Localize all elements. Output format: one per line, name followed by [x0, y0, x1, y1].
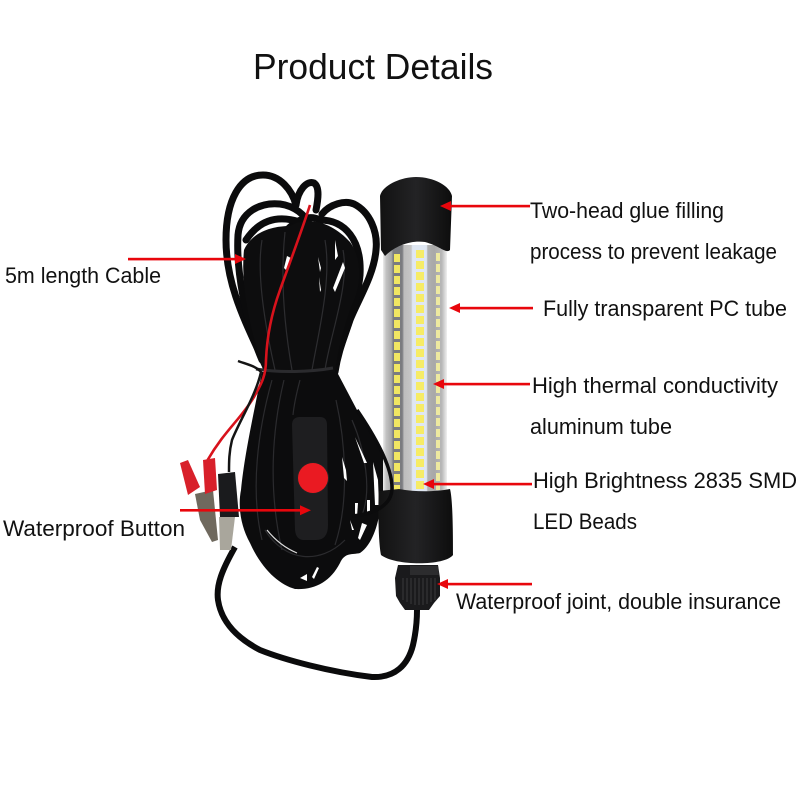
- PC tube: [383, 245, 447, 495]
- lower cable gaps: [300, 437, 379, 581]
- lower cable highlights: [256, 380, 367, 557]
- arrow: aluminum tube: [433, 379, 530, 389]
- cable gaps: [284, 240, 345, 292]
- lower cable mass: [240, 372, 393, 589]
- arrow: glue cap: [440, 201, 530, 211]
- arrow: PC tube: [449, 303, 533, 313]
- alligator clips: [180, 458, 239, 550]
- cable highlights: [260, 232, 344, 370]
- label: aluminum tube: [530, 373, 778, 439]
- switch button: [292, 417, 329, 540]
- label: LED beads: [533, 468, 797, 534]
- label: glue filling: process to prevent leakage: [530, 239, 777, 264]
- LED strips: [394, 249, 440, 490]
- title: Product Details: [253, 46, 493, 87]
- arrow: LED beads: [423, 479, 532, 489]
- label: cable: 5m length Cable: [5, 263, 161, 288]
- upper cable mass: [243, 221, 359, 372]
- bottom cap: [378, 489, 453, 563]
- label: LED beads: High Brightness 2835 SMD: [533, 468, 797, 493]
- label: PC tube: Fully transparent PC tube: [543, 296, 787, 321]
- upper cable loops: [226, 175, 376, 372]
- red and black clip wires: [207, 205, 310, 472]
- cable gland: [395, 565, 440, 610]
- label: glue filling: Two-head glue filling: [530, 198, 724, 223]
- top cap: [380, 177, 452, 256]
- arrow: 5m cable: [128, 254, 246, 264]
- label: joint: Waterproof joint, double insurance: [456, 589, 781, 614]
- cable loop over lamp cap: [352, 410, 392, 516]
- label: button: Waterproof Button: [3, 516, 185, 541]
- long cable to lamp: [218, 547, 417, 677]
- label: glue filling: [530, 198, 777, 264]
- cable tie: [256, 368, 333, 372]
- lamp: [378, 177, 453, 610]
- arrow: joint: [437, 579, 532, 589]
- arrow: button: [180, 505, 311, 515]
- white arc between strands: [267, 530, 297, 553]
- label: aluminum tube: High thermal conductivity: [532, 373, 778, 398]
- label: LED beads: LED Beads: [533, 509, 637, 534]
- cable bundle: [226, 175, 393, 589]
- label: aluminum tube: aluminum tube: [530, 414, 672, 439]
